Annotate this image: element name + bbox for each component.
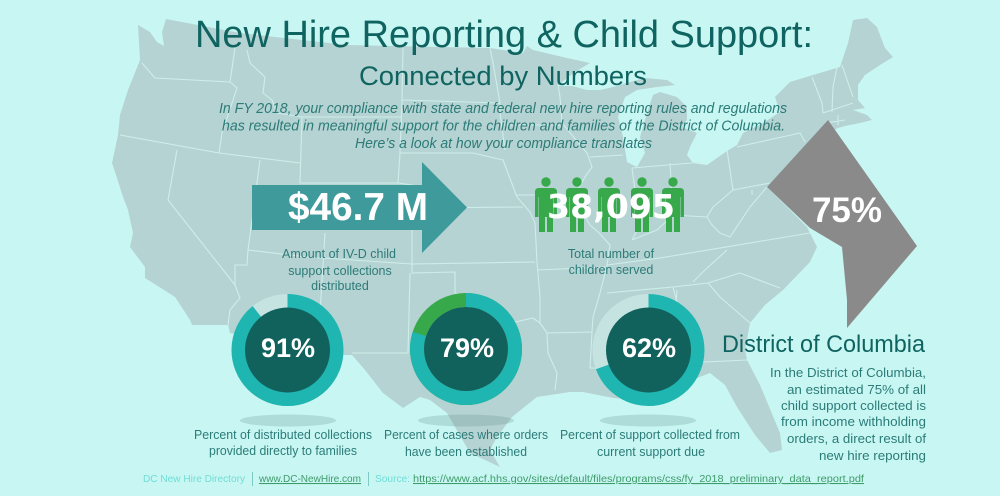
subtitle: Connected by Numbers — [359, 61, 647, 91]
footer — [143, 472, 864, 486]
intro text — [219, 100, 787, 152]
caption: 62%: current support due — [597, 444, 705, 459]
children caption: Total number of — [568, 247, 655, 261]
intro text: has resulted in meaningful support for the children and families of the District of Columbia. — [222, 118, 785, 134]
collections caption — [282, 247, 396, 293]
caption: 79% — [384, 427, 548, 459]
caption: 91% — [194, 427, 372, 458]
donut: 79%: 79% — [440, 333, 494, 363]
District of Columbia description: orders, a direct result of — [787, 431, 926, 446]
donut: 91%: 91% — [261, 333, 315, 363]
caption: 79%: Percent of cases where orders — [384, 427, 548, 442]
District of Columbia description: child support collected is — [781, 398, 926, 413]
collections caption: Amount of IV-D child — [282, 247, 396, 261]
donut: 91% — [238, 301, 336, 399]
caption: 79%: have been established — [405, 444, 527, 459]
map: United States — [112, 18, 893, 467]
District of Columbia description — [770, 365, 926, 463]
caption: 62% — [560, 427, 740, 459]
caption: 91%: provided directly to families — [209, 443, 357, 458]
collections caption: support collections — [288, 264, 392, 278]
heading: District of Columbia: District of Columbia — [722, 331, 926, 358]
footer: www.DC-NewHire.com — [258, 473, 361, 485]
District of Columbia description: an estimated 75% of all — [787, 382, 926, 397]
donut: 62%: 62% — [622, 333, 676, 363]
District of Columbia description: new hire reporting — [819, 448, 926, 463]
arrow: collections distributed — [252, 162, 467, 253]
donut: 62% — [600, 301, 698, 399]
title: New Hire Reporting & Child Support: — [195, 14, 813, 56]
footer: DC New Hire Directory — [143, 473, 246, 485]
children caption — [568, 247, 655, 277]
footer: Source: — [375, 473, 410, 485]
donut: 79% — [417, 300, 515, 398]
icon: children row — [535, 177, 684, 232]
District of Columbia description: from income withholding — [781, 414, 926, 429]
footer: https://www.acf.hhs.gov/sites/default/files/programs/css/fy_2018_preliminary_data_report.pdf — [413, 473, 864, 485]
District of Columbia description: In the District of Columbia, — [770, 365, 926, 380]
children served number: 38,095 — [547, 187, 675, 226]
intro text: In FY 2018, your compliance with state and federal new hire reporting rules and regulations — [219, 100, 787, 117]
donut shadows — [240, 414, 696, 426]
DC shape with percentage: 75% — [812, 191, 882, 230]
intro text: Here’s a look at how your compliance translates — [355, 135, 652, 152]
collections caption: distributed — [311, 279, 369, 293]
children caption: children served — [569, 263, 653, 277]
DC shape with percentage — [767, 120, 917, 328]
caption: 62%: Percent of support collected from — [560, 427, 740, 442]
arrow: collections distributed: $46.7 M — [288, 186, 428, 229]
caption: 91%: Percent of distributed collections — [194, 427, 372, 442]
